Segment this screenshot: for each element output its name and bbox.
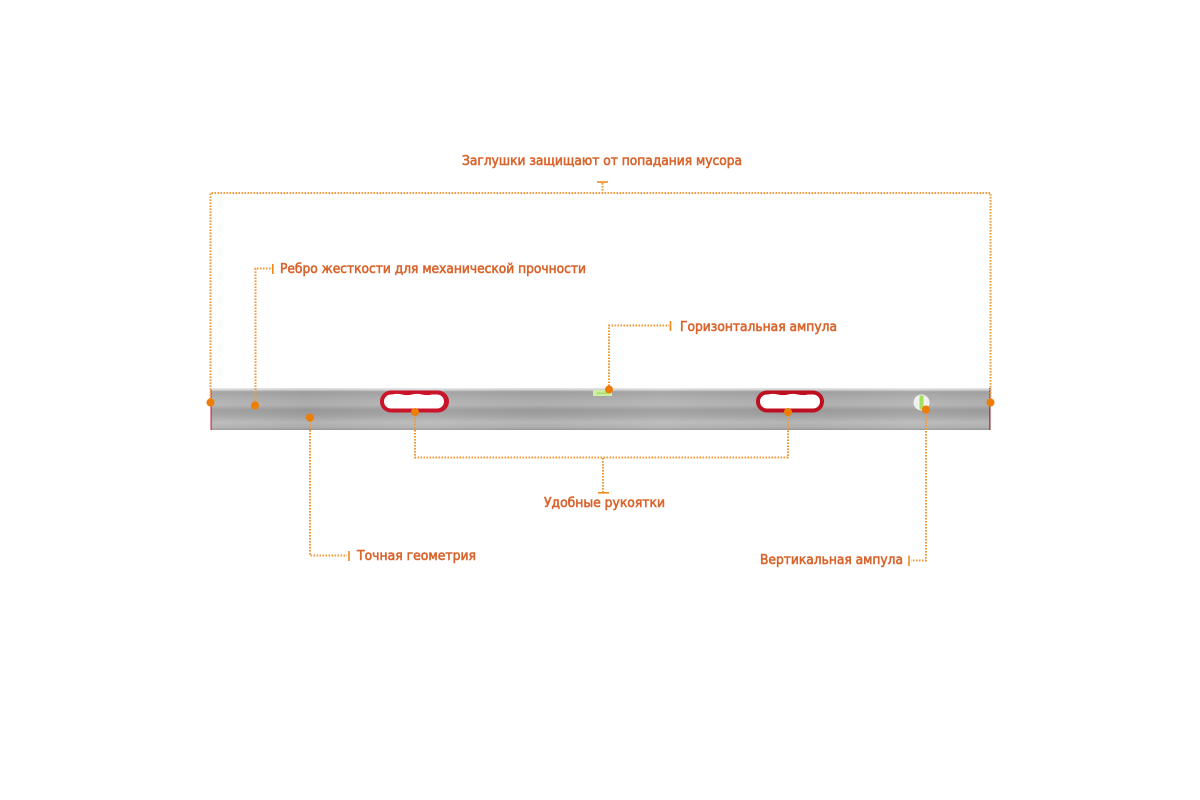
tick: rib <box>272 264 274 274</box>
leader line: geometry <box>310 418 347 556</box>
dot: geometry <box>306 414 314 422</box>
tick: vertical vial <box>908 556 910 566</box>
tick: geometry <box>348 551 350 561</box>
callout: handles <box>411 408 792 511</box>
left handle <box>380 390 449 412</box>
leader line: vertical vial <box>911 410 926 560</box>
stem: end caps <box>602 183 604 193</box>
horizontal vial <box>593 390 612 396</box>
dot: right handle <box>784 408 792 416</box>
callout: horizontal vial <box>605 320 837 394</box>
vertical vial <box>914 394 930 410</box>
dot: right end <box>986 398 994 406</box>
label: rib: Ребро жесткости для механической прочности <box>280 262 586 277</box>
callout: vertical vial <box>760 406 930 568</box>
leader line: horizontal vial <box>609 326 669 389</box>
callout: stiffening rib <box>251 262 586 410</box>
aluminium rule <box>210 388 990 430</box>
callout: precise geometry <box>306 414 476 564</box>
stem: handles <box>602 458 604 492</box>
left end cap <box>210 390 212 430</box>
dot: vertical vial <box>922 406 930 414</box>
tick: end caps <box>597 181 608 183</box>
dot: horizontal vial <box>605 386 613 394</box>
right end cap <box>989 388 990 430</box>
leader line: rib <box>256 268 271 405</box>
rule body <box>211 388 990 430</box>
label: geometry: Точная геометрия <box>356 549 476 564</box>
right handle <box>756 390 824 412</box>
dot: left handle <box>411 408 419 416</box>
dot: left end <box>206 398 214 406</box>
leader line: end caps <box>210 193 990 402</box>
label: vertical vial: Вертикальная ампула <box>760 553 903 568</box>
tick: handles <box>598 492 609 494</box>
callout: end caps <box>206 154 994 406</box>
label: end caps: Заглушки защищают от попадания мусора <box>462 154 742 169</box>
dot: rib <box>251 402 259 410</box>
tick: horizontal vial <box>670 321 672 331</box>
leader line: handles <box>415 412 788 458</box>
label: handles: Удобные рукоятки <box>544 496 665 511</box>
label: horizontal vial: Горизонтальная ампула <box>680 320 837 335</box>
